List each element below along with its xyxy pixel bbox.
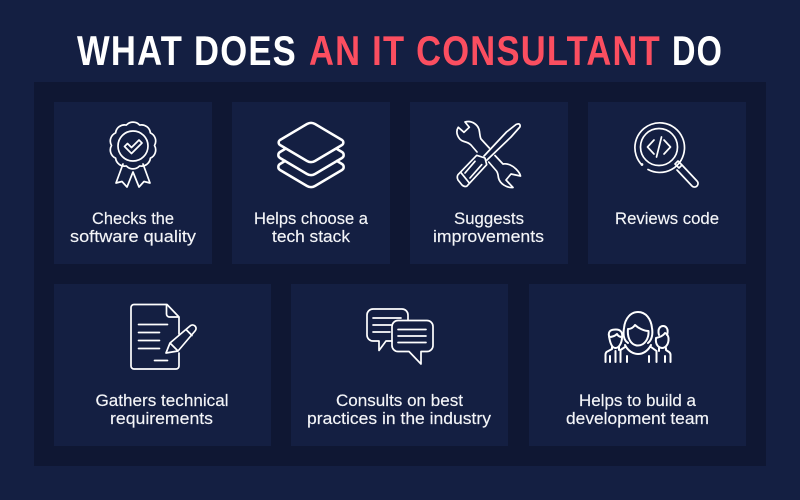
text: helps choose a tech stack: tech stack — [272, 227, 350, 246]
icon: document with pencil — [131, 304, 196, 369]
text: gathers technical requirements — [96, 391, 228, 428]
text: checks the software quality — [70, 209, 197, 246]
text: consults on best practices in the industry — [307, 391, 492, 428]
text: consults on best practices in the industry: Consults on best — [336, 391, 463, 410]
title: DO — [672, 27, 723, 74]
text: helps to build a development team: development team — [566, 409, 709, 428]
main panel — [34, 82, 766, 466]
text: helps choose a tech stack — [254, 209, 369, 246]
card: helps choose a tech stack — [232, 102, 390, 264]
card: reviews code — [588, 102, 746, 264]
icon: wrench and screwdriver — [457, 122, 520, 188]
text: suggests improvements — [433, 209, 544, 246]
text: reviews code: Reviews code — [615, 209, 719, 228]
title — [77, 27, 723, 74]
text: checks the software quality: software quality — [70, 227, 197, 246]
text: helps to build a development team: Helps to build a — [579, 391, 697, 410]
text: consults on best practices in the industry: practices in the industry — [307, 409, 492, 428]
icon: team of people — [606, 312, 670, 362]
card: gathers technical requirements — [54, 284, 271, 446]
icon: stacked layers — [278, 123, 344, 187]
icon: award badge — [110, 122, 156, 187]
text: helps choose a tech stack: Helps choose a — [254, 209, 369, 228]
card: helps to build a development team — [529, 284, 746, 446]
icon: magnifier with code — [635, 123, 698, 187]
title: WHAT DOES — [77, 27, 297, 74]
text: suggests improvements: Suggests — [454, 209, 524, 228]
text: gathers technical requirements: Gathers technical — [96, 391, 228, 410]
icon: chat bubbles — [367, 309, 433, 364]
card: suggests improvements — [410, 102, 568, 264]
card: checks the software quality — [54, 102, 212, 264]
text: suggests improvements: improvements — [433, 227, 544, 246]
card: consults on best practices — [291, 284, 508, 446]
text: gathers technical requirements: requirements — [110, 409, 213, 428]
text: helps to build a development team — [566, 391, 709, 428]
title: AN IT CONSULTANT — [309, 27, 661, 74]
text: checks the software quality: Checks the — [92, 209, 174, 228]
